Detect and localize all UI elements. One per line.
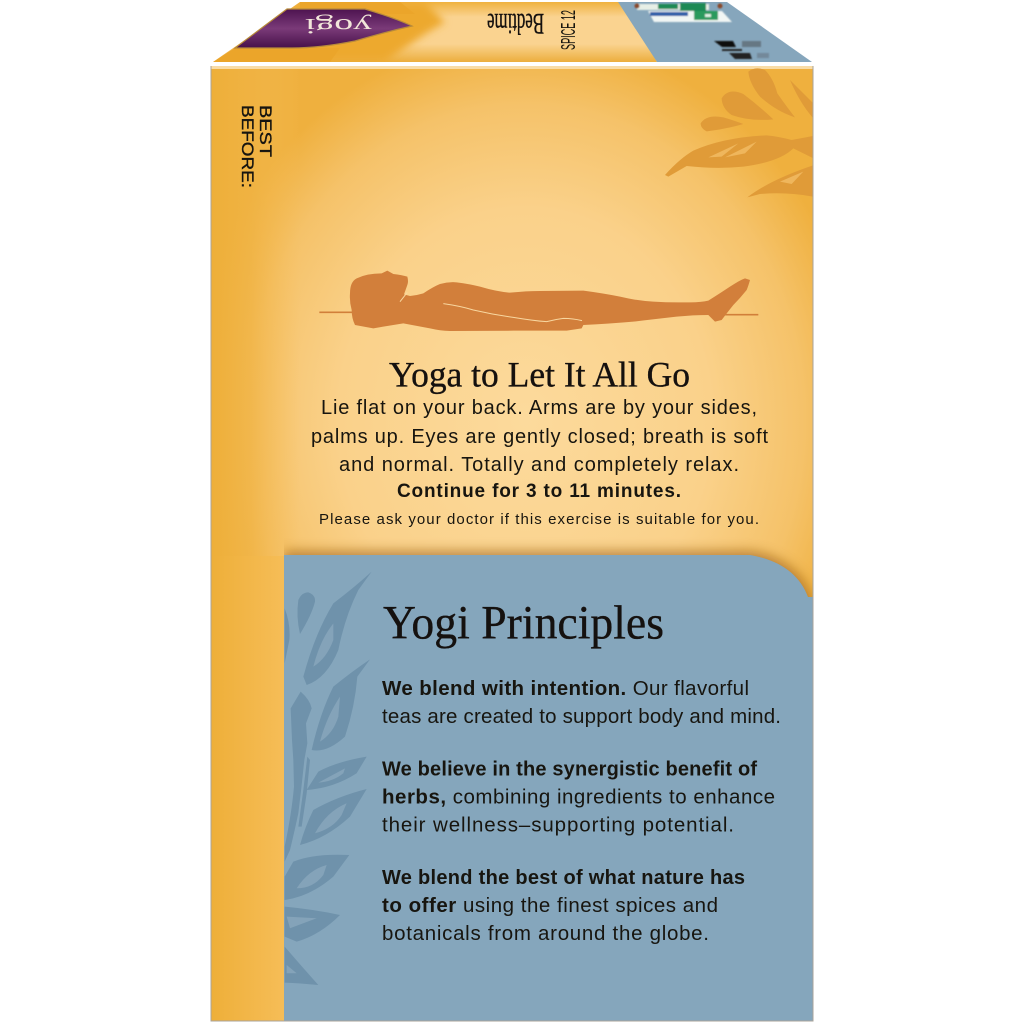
yoga heading: Yoga to Let It All Go — [389, 354, 690, 394]
yoga instructions — [311, 397, 768, 528]
yoga instructions: palms up. Eyes are gently closed; breath is soft — [311, 426, 768, 448]
decorative plant — [285, 572, 372, 985]
best before label: BEST — [256, 105, 275, 157]
yogi logo: yogi — [305, 14, 372, 39]
decorative leaves top right — [665, 68, 813, 197]
decorative gold pattern — [213, 2, 445, 62]
best before label — [238, 105, 275, 188]
principle 2: We believe in the synergistic benefit of — [382, 758, 757, 780]
principle 1 — [382, 677, 781, 728]
principle 3: to offer using the finest spices and — [382, 894, 718, 917]
leaf streaks — [708, 142, 803, 184]
box edge — [211, 66, 813, 1021]
tea box back panel — [210, 2, 814, 1022]
principle 1: teas are created to support body and mind. — [382, 705, 781, 728]
plant leaf streaks — [287, 623, 347, 973]
principle 2: their wellness–supporting potential. — [382, 814, 734, 836]
panel shadow — [284, 544, 812, 597]
principle 2: herbs, combining ingredients to enhance — [382, 786, 775, 808]
principle 2 — [382, 758, 775, 836]
blue end of top flap — [618, 2, 812, 62]
yoga instructions: Continue for 3 to 11 minutes. — [397, 481, 681, 502]
principle 3: We blend the best of what nature has — [382, 867, 745, 889]
product name: Bedtime — [487, 7, 544, 39]
principle 3: botanicals from around the globe. — [382, 922, 709, 945]
floor line — [319, 312, 758, 315]
principle 1: We blend with intention. Our flavorful — [382, 677, 749, 700]
best before label: BEFORE: — [238, 105, 257, 188]
purple banner — [235, 9, 412, 48]
left edge darkening — [211, 66, 301, 556]
panel: yogi principles — [284, 555, 813, 1021]
arm highlight — [443, 304, 582, 322]
yoga instructions: and normal. Totally and completely relax. — [339, 454, 739, 476]
front panel background — [211, 66, 813, 1021]
principles heading: Yogi Principles — [383, 596, 664, 650]
certification seals — [634, 3, 732, 22]
left gold strip — [211, 556, 284, 1021]
reclining yoga figure — [319, 271, 758, 331]
light top edge — [211, 66, 813, 69]
yoga instructions: Please ask your doctor if this exercise is suitable for you. — [319, 511, 759, 528]
principle 3 — [382, 867, 745, 945]
barcode marks — [714, 41, 769, 59]
body silhouette — [350, 271, 750, 331]
top flap of the box — [213, 2, 812, 62]
yoga instructions: Lie flat on your back. Arms are by your sides, — [321, 397, 757, 419]
